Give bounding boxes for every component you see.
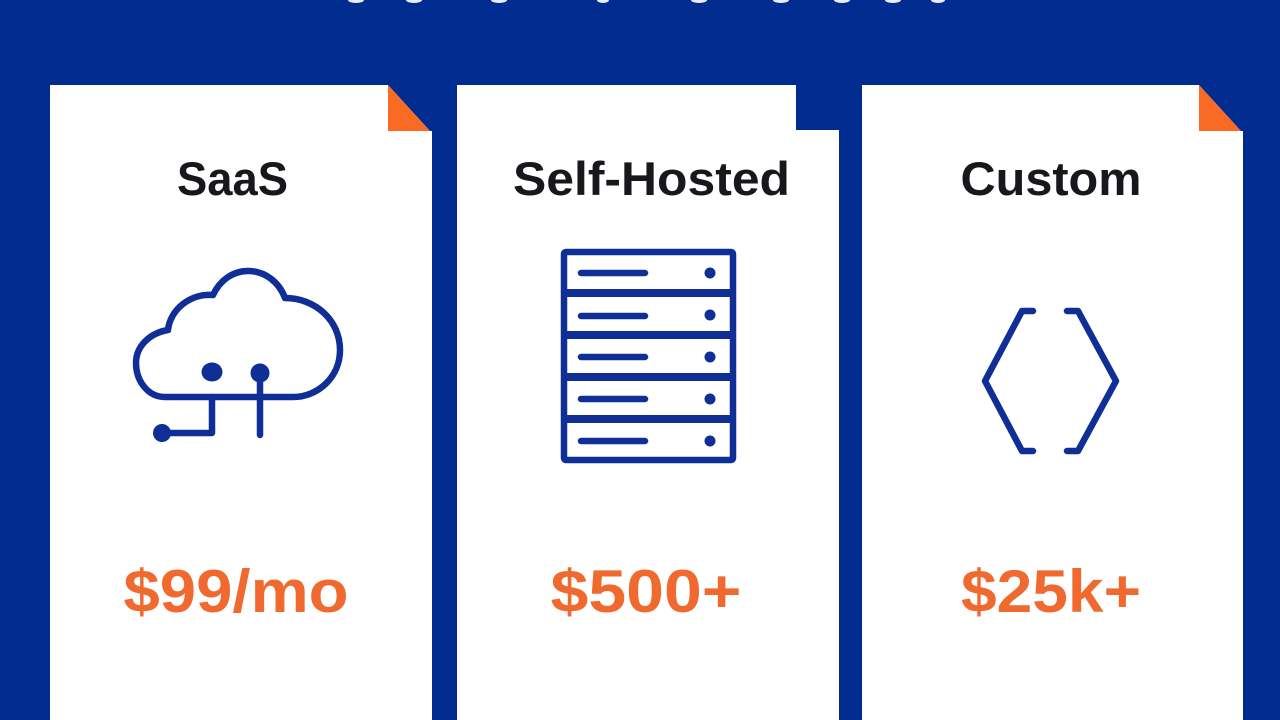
orange folded corner bbox=[388, 85, 430, 131]
icon: cloud with circuit nodes bbox=[136, 271, 340, 442]
icon: server rack bbox=[564, 252, 733, 460]
heading: Custom: Custom bbox=[960, 152, 1142, 205]
panel: SaaS bbox=[50, 85, 432, 720]
clipped title remnants at top edge bbox=[348, 0, 945, 3]
orange folded corner bbox=[1199, 85, 1241, 131]
price: SaaS: $99/mo bbox=[124, 558, 348, 625]
panel: Self-Hosted bbox=[457, 85, 839, 720]
card background with notched corner bbox=[457, 85, 839, 720]
icon: code brackets bbox=[985, 311, 1116, 451]
price: Self-Hosted: $500+ bbox=[550, 558, 742, 625]
card background bbox=[862, 85, 1243, 720]
heading: SaaS: SaaS bbox=[177, 152, 288, 205]
heading: Self-Hosted: Self-Hosted bbox=[513, 152, 790, 205]
panel: Custom bbox=[862, 85, 1243, 720]
price: Custom: $25k+ bbox=[961, 558, 1141, 625]
card background bbox=[50, 85, 432, 720]
